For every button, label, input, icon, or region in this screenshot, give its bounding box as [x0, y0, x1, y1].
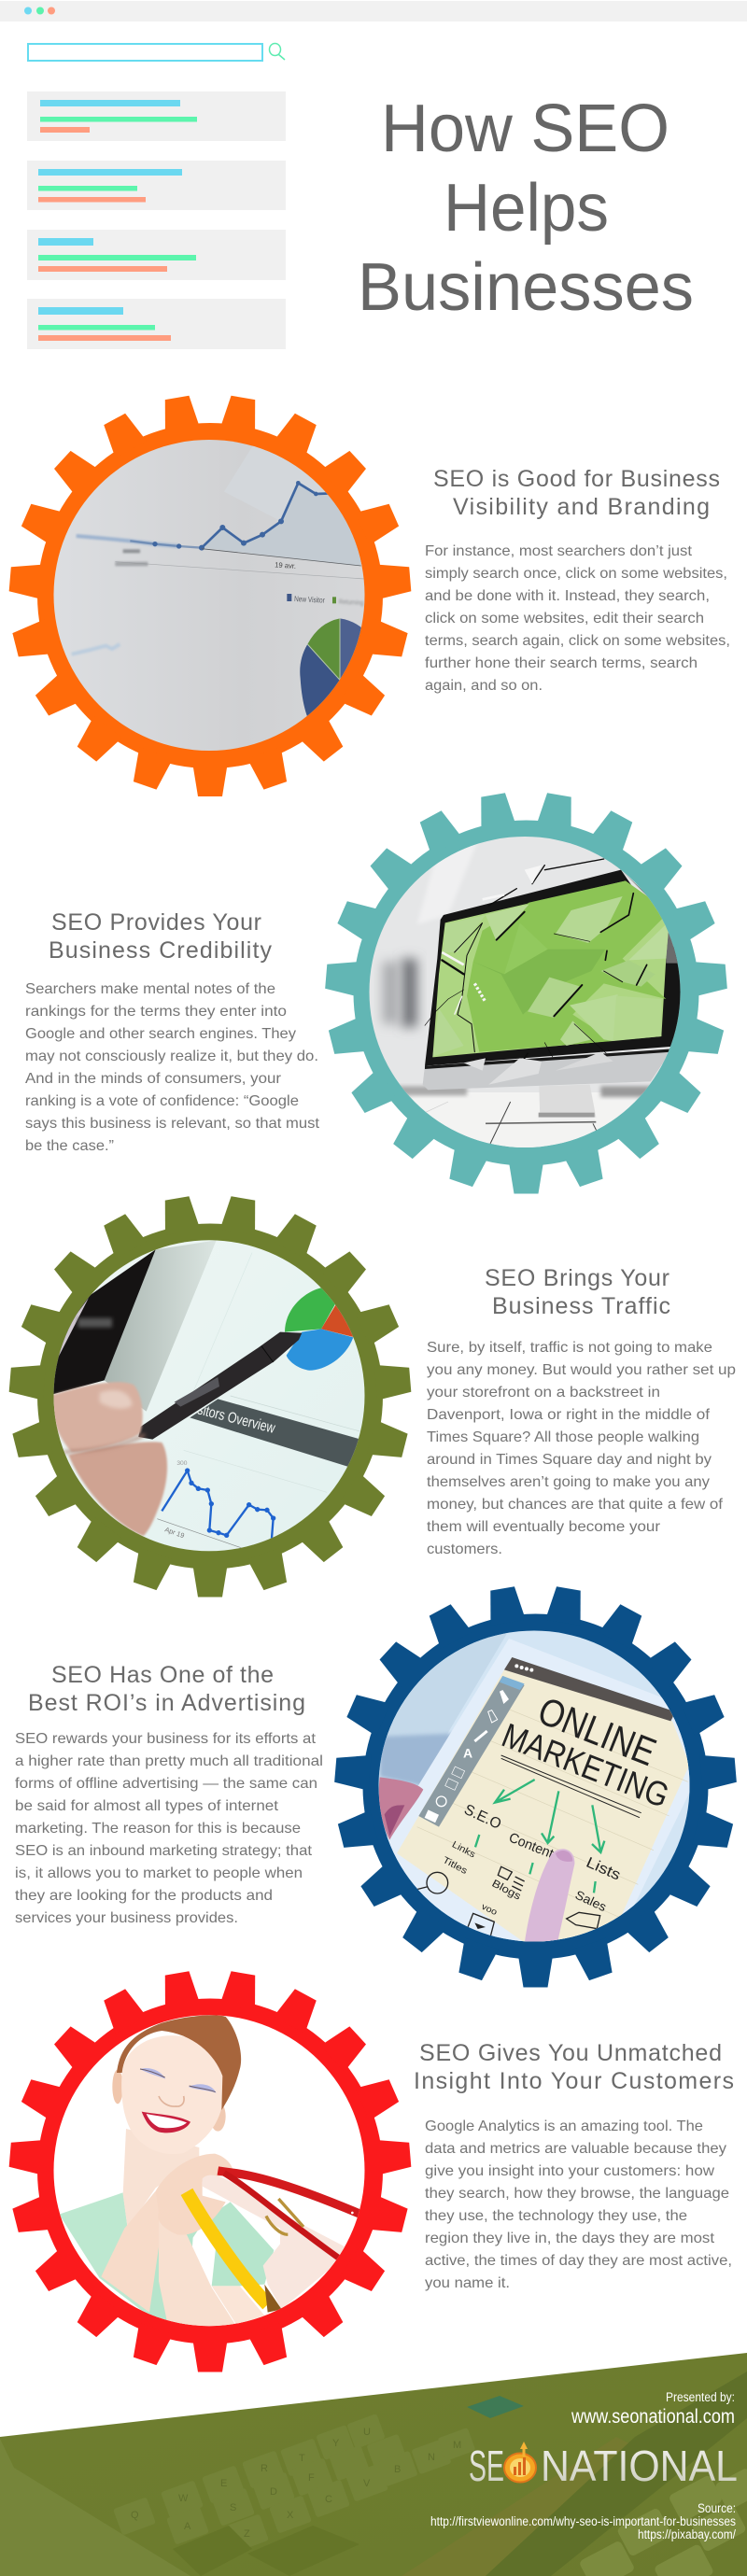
- keyboard letters: E: [220, 2478, 227, 2489]
- section 2: credibility: [25, 792, 727, 1193]
- body text: data and metrics are valuable because they: [425, 2141, 726, 2157]
- body text: says this business is relevant, so that must: [25, 1116, 320, 1132]
- footer: olive keyboard background: [0, 2353, 747, 2576]
- photo: online marketing tablet: voo: [480, 1902, 499, 1917]
- body text: [427, 1340, 736, 1557]
- keyboard letters: Y: [332, 2438, 340, 2449]
- keyboard letters: Z: [244, 2528, 250, 2540]
- heading: Best ROI’s in Advertising: [28, 1690, 305, 1716]
- keyboard letters: R: [261, 2463, 268, 2474]
- body text: be said for almost all types of internet: [15, 1798, 279, 1814]
- photo: online marketing tablet: MARKETING: [497, 1716, 674, 1815]
- section 5: customer insight: [8, 1970, 734, 2372]
- keyboard letters: C: [325, 2494, 332, 2505]
- heading: [49, 909, 273, 964]
- heading: SEO Gives You Unmatched: [419, 2040, 722, 2066]
- body text: [425, 2119, 732, 2291]
- photo: analytics screen: [49, 436, 371, 756]
- gear: olive: [8, 1195, 412, 1597]
- body text: they use, the technology they use, the: [425, 2208, 687, 2224]
- section 3: traffic: [8, 1195, 736, 1598]
- body text: Sure, by itself, traffic is not going to make: [427, 1340, 712, 1356]
- body text: customers.: [427, 1541, 502, 1557]
- gear: red: [8, 1970, 412, 2372]
- photo: online marketing tablet: Lists: [584, 1854, 623, 1884]
- photo: pen pointing at analytics: sitors Overview: [196, 1401, 277, 1437]
- keyboard letters: V: [363, 2478, 371, 2489]
- body text: Times Square? All those people walking: [427, 1429, 699, 1445]
- body text: them will eventually become your: [427, 1519, 661, 1535]
- keyboard letters: D: [270, 2486, 277, 2498]
- keyboard letters: T: [299, 2453, 305, 2464]
- body text: Davenport, Iowa or right in the middle of: [427, 1407, 711, 1423]
- photo: analytics screen: New Visitor: [294, 594, 325, 605]
- icon: logo circle with bars and arrow: [504, 2442, 536, 2482]
- keyboard letters: N: [428, 2452, 435, 2463]
- source credits: [430, 2501, 736, 2541]
- heading: Business Credibility: [49, 937, 273, 964]
- body text: Google and other search engines. They: [25, 1026, 296, 1042]
- body text: your storefront on a backstreet in: [427, 1385, 660, 1401]
- section 1: visibility and branding: [8, 395, 730, 796]
- body text: a higher rate than pretty much all traditional: [15, 1753, 323, 1769]
- gear: orange: [8, 395, 412, 796]
- keyboard letters: M: [453, 2440, 461, 2451]
- keyboard letters: B: [394, 2464, 401, 2475]
- body text: SEO rewards your business for its efforts at: [15, 1731, 317, 1747]
- title: How SEO: [381, 91, 669, 166]
- keyboard letters: W: [178, 2493, 189, 2504]
- body text: services your business provides.: [15, 1910, 238, 1926]
- body text: they are looking for the products and: [15, 1888, 273, 1904]
- body text: you name it.: [425, 2275, 510, 2291]
- photo: online marketing tablet: Blogs: [490, 1878, 523, 1903]
- heading: SEO Provides Your: [51, 909, 261, 936]
- desk and second keyboard keys: [578, 2467, 747, 2576]
- heading: SEO is Good for Business: [433, 466, 720, 492]
- body text: rankings for the terms they enter into: [25, 1004, 287, 1020]
- body text: [25, 981, 320, 1154]
- photo: online marketing tablet: Sales: [573, 1888, 609, 1914]
- keyboard letters: [113, 2396, 524, 2576]
- section 4: ROI: [15, 1585, 737, 1987]
- body text: again, and so on.: [425, 678, 543, 694]
- body text: active, the times of day they are most active,: [425, 2253, 732, 2269]
- body text: money, but chances are that quite a few of: [427, 1497, 724, 1513]
- photo: online marketing tablet: Content: [506, 1831, 556, 1862]
- body text: forms of offline advertising — the same can: [15, 1776, 317, 1792]
- body text: simply search once, click on some websites,: [425, 566, 727, 582]
- body text: themselves aren’t going to make you any: [427, 1474, 710, 1490]
- photo: analytics screen: Returning: [339, 598, 364, 607]
- heading: Visibility and Branding: [453, 494, 710, 520]
- heading: [485, 1265, 670, 1319]
- logo: SEO National: NATIONAL: [541, 2442, 738, 2490]
- photo: pen pointing at analytics: 300: [176, 1460, 188, 1467]
- body text: further hone their search terms, search: [425, 655, 698, 671]
- body text: click on some websites, edit their search: [425, 611, 704, 626]
- heading: SEO Brings Your: [485, 1265, 669, 1291]
- presenter credits: Presented by:: [666, 2390, 735, 2404]
- heading: [28, 1662, 305, 1716]
- heading: [414, 2040, 734, 2094]
- body text: around in Times Square day and night by: [427, 1452, 712, 1468]
- body text: SEO is an inbound marketing strategy; that: [15, 1843, 313, 1859]
- browser top bar: [0, 1, 747, 21]
- photo: online marketing tablet: Links: [450, 1839, 477, 1861]
- keyboard letters: U: [363, 2427, 371, 2438]
- body text: may not consciously realize it, but they do.: [25, 1049, 318, 1064]
- heading: SEO Has One of the: [51, 1662, 274, 1688]
- keyboard letters: Q: [131, 2510, 139, 2521]
- photo: pen pointing at analytics: [49, 1237, 371, 1557]
- heading: Insight Into Your Customers: [414, 2068, 734, 2094]
- keyboard letters: S: [230, 2502, 236, 2513]
- body text: be the case.”: [25, 1138, 114, 1154]
- body text: region they live in, the days they are most: [425, 2231, 715, 2246]
- search results list: [27, 91, 286, 349]
- keyboard letters: F: [308, 2472, 315, 2484]
- body text: [15, 1731, 323, 1926]
- keyboard letters: X: [287, 2510, 294, 2521]
- title: [358, 91, 694, 325]
- result row 1: [27, 91, 286, 141]
- result row 4: [27, 299, 286, 349]
- photo: pen pointing at analytics: Apr 19: [163, 1525, 186, 1540]
- body text: Searchers make mental notes of the: [25, 981, 275, 997]
- body text: [425, 543, 730, 694]
- body text: is, it allows you to market to people when: [15, 1865, 303, 1881]
- body text: terms, search again, click on some websites,: [425, 633, 730, 649]
- icon: magnifier: [269, 43, 285, 60]
- gear: teal: [325, 792, 727, 1193]
- body text: marketing. The reason for this is because: [15, 1821, 301, 1837]
- body text: and be done with it. Instead, they search,: [425, 588, 710, 604]
- title: Businesses: [358, 250, 694, 325]
- photo: online marketing tablet: S.E.O: [461, 1802, 503, 1833]
- search box: [28, 43, 285, 61]
- heading: Business Traffic: [492, 1293, 670, 1319]
- photo: online marketing tablet: A: [463, 1746, 472, 1761]
- body text: Google Analytics is an amazing tool. The: [425, 2119, 703, 2134]
- body text: For instance, most searchers don’t just: [425, 543, 693, 559]
- result row 3: [27, 230, 286, 280]
- title: Helps: [444, 171, 609, 246]
- photo: online marketing tablet: [374, 1625, 698, 1949]
- body text: give you insight into your customers: how: [425, 2163, 714, 2179]
- result row 2: [27, 161, 286, 210]
- source credits: Source:: [698, 2501, 736, 2515]
- photo: cracked monitor: [364, 831, 688, 1155]
- heading: [433, 466, 720, 520]
- gear: blue: [334, 1585, 737, 1987]
- keyboard letters: A: [184, 2521, 191, 2532]
- photo: online marketing tablet: Titles: [441, 1855, 469, 1877]
- photo: analytics screen: 19 avr.: [275, 560, 296, 570]
- body text: you any money. But would you rather set up: [427, 1362, 736, 1378]
- logo: SEO National: SE: [469, 2442, 504, 2490]
- source credits: https://pixabay.com/: [638, 2527, 736, 2541]
- presenter credits: [571, 2390, 735, 2428]
- photo: smiling woman with handbag: [47, 2007, 374, 2334]
- body text: ranking is a vote of confidence: “Google: [25, 1093, 299, 1109]
- body text: And in the minds of consumers, your: [25, 1071, 282, 1087]
- photo: online marketing tablet: ONLINE: [532, 1688, 662, 1774]
- body text: they search, how they browse, the language: [425, 2186, 729, 2202]
